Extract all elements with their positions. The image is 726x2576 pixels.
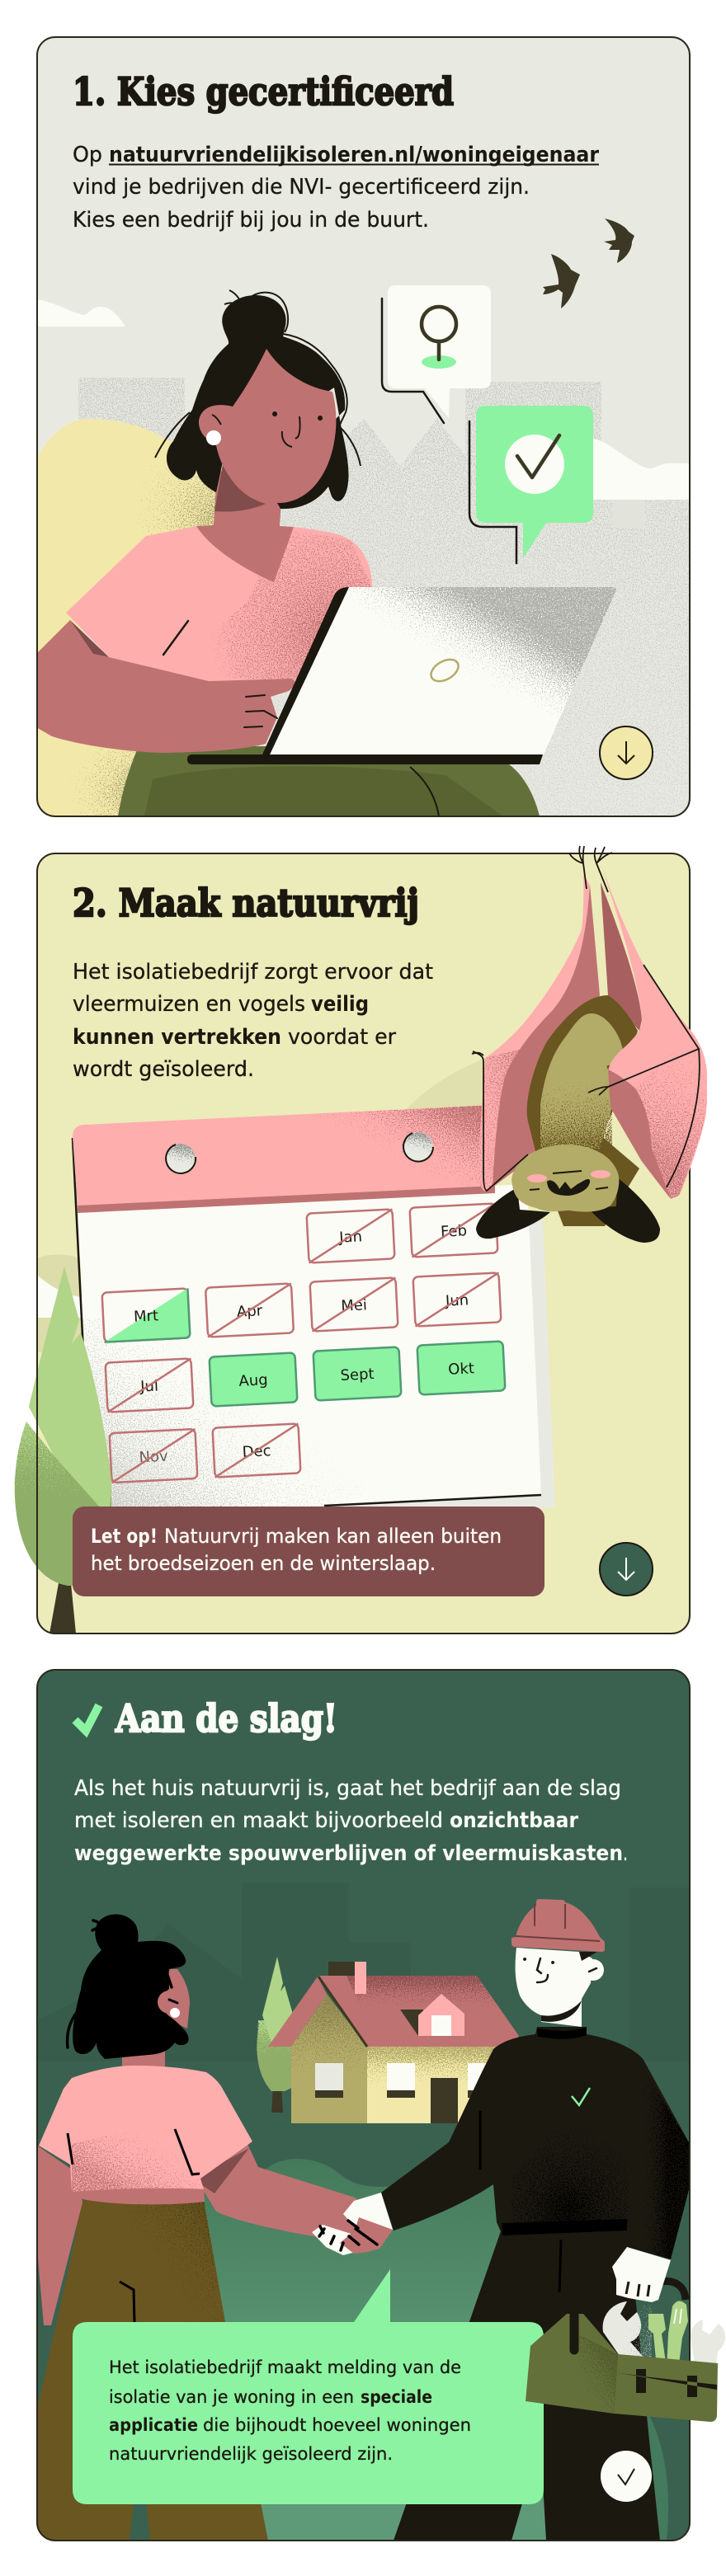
- hair: [167, 295, 349, 509]
- month: Jul: Jul: [139, 1377, 158, 1396]
- tree upper crown: [29, 1267, 111, 1516]
- ear line: [169, 2000, 177, 2003]
- calendar grain: [82, 1303, 541, 1517]
- callout: let op: Natuurvrij maken kan alleen buiten: [164, 1525, 502, 1548]
- tree trunk: [50, 1583, 76, 1634]
- panel 2 border: [37, 853, 690, 1634]
- waist: [72, 2185, 205, 2204]
- bat left wing inner: [493, 885, 600, 1187]
- hair outline: [155, 334, 361, 466]
- neck shadow: [214, 464, 266, 512]
- screwdriver highlight: [674, 2309, 681, 2324]
- callout: speciale applicatie: isolatie van je woning in een: [109, 2387, 354, 2408]
- laptop grain: [270, 587, 616, 754]
- intro text block 2: wordt geïsoleerd.: [73, 1057, 254, 1082]
- knee line: [410, 767, 439, 816]
- wrench left: [603, 2301, 652, 2367]
- arm grain: [631, 2061, 691, 2259]
- callout: speciale applicatie: die bijhoudt hoeveel woningen: [203, 2415, 471, 2436]
- collar: [537, 2027, 587, 2039]
- heading text: Aan de slag!: [115, 1696, 337, 1741]
- eyes: [272, 411, 323, 421]
- hole right: [403, 1132, 433, 1162]
- pants shading: [144, 766, 503, 816]
- month: Apr: [205, 1283, 294, 1337]
- pants: [36, 2200, 268, 2541]
- calendar back page: [91, 1219, 555, 1527]
- month: Mei: [310, 1277, 398, 1332]
- intro text block 1: natuurvriendelijkisoleren.nl/woningeigenaar: [109, 143, 599, 167]
- finger lines: [244, 695, 277, 727]
- intro text block 1: [73, 143, 599, 233]
- left gable wall: [291, 1994, 367, 2123]
- intro text block 3: .: [623, 1841, 628, 1866]
- callout: speciale applicatie: applicatie: [109, 2415, 198, 2436]
- bat belly grain: [540, 1080, 612, 1149]
- door: [431, 2078, 458, 2123]
- lighter window in the town: [612, 500, 645, 528]
- woman: [36, 290, 540, 816]
- dormer: [418, 1994, 464, 2036]
- right wall: [367, 2047, 507, 2123]
- month: Feb: Feb: [441, 1222, 468, 1241]
- bat right wing fold: [608, 1069, 671, 1199]
- eyes: [523, 1958, 554, 1964]
- nose and mouth: [282, 416, 300, 447]
- button: arrow down (green): [600, 1543, 653, 1596]
- gable roof: [268, 1977, 327, 2047]
- intro text block 1: vind je bedrijven die NVI- gecertificeerd zijn.: [73, 175, 530, 200]
- crease lines: [480, 2111, 561, 2292]
- intro text block 2: veilig: [311, 992, 369, 1017]
- wrench grain: [606, 2305, 652, 2367]
- bat mouth: [547, 1179, 590, 1196]
- roof grain: [346, 1976, 503, 2014]
- shirt fold: [163, 621, 188, 655]
- speech bubble: location pin: [382, 285, 491, 423]
- hills left of calendar: [36, 1254, 91, 1352]
- box strap: [569, 2314, 579, 2350]
- hair: [73, 1915, 189, 2059]
- bat blush: [527, 1170, 610, 1182]
- chimney pink: [355, 1962, 366, 1994]
- month: Okt: [417, 1341, 505, 1395]
- dark town silhouette: [36, 1883, 690, 2061]
- intro text block 3: [74, 1776, 628, 1866]
- month: Dec: Dec: [242, 1442, 271, 1461]
- small tree trunk: [271, 2086, 283, 2113]
- ear line: [212, 415, 221, 425]
- chimney dark: [328, 1962, 355, 1995]
- roof line: [318, 1977, 367, 2047]
- month: Feb: [410, 1203, 497, 1257]
- dormer shadow: [400, 2010, 423, 2036]
- pants: [118, 746, 540, 816]
- callout: speciale applicatie: natuurvriendelijk geïsoleerd zijn.: [109, 2444, 393, 2465]
- sideburn: [579, 1952, 597, 1961]
- sleeve shadow: [70, 620, 109, 657]
- panel fill: [36, 36, 690, 816]
- bush grain shadow bottom: [69, 747, 136, 816]
- month: Sept: [314, 1347, 401, 1401]
- month: Jul: [106, 1358, 193, 1413]
- callout: speciale applicatie: speciale: [361, 2387, 432, 2408]
- toolbox handle: [662, 2282, 686, 2300]
- intro text block 2: vleermuizen en vogels: [73, 992, 305, 1017]
- bat feet: [569, 846, 612, 892]
- arm: [36, 620, 295, 753]
- box right side: [614, 2354, 718, 2422]
- faint hill right of the worker: [635, 2391, 668, 2541]
- pants fold: [120, 2282, 134, 2322]
- toolbox: [526, 2301, 725, 2422]
- month: Aug: [210, 1352, 297, 1407]
- callout: let op: het broedseizoen en de winterslaap.: [91, 1552, 436, 1575]
- house and tree: [257, 1957, 519, 2123]
- bat belly: [540, 1013, 623, 1149]
- calendar header strip: [78, 1186, 495, 1213]
- bun outline and wisps: [224, 290, 288, 332]
- callout: speciale applicatie: Het isolatiebedrijf maakt melding van de: [109, 2357, 461, 2378]
- panel fill: [36, 853, 690, 1634]
- panel fill: [36, 1669, 690, 2541]
- intro text block 1: Op: [73, 143, 102, 167]
- heading 2: 2. Maak natuurvrij: [73, 881, 419, 925]
- month: Jun: Jun: [445, 1291, 469, 1310]
- hand holding box: [612, 2247, 671, 2302]
- shirt lines: [68, 2129, 200, 2174]
- hole left: [166, 1144, 196, 1173]
- helmet lines: [516, 1904, 600, 1941]
- month: Sept: Sept: [340, 1366, 375, 1384]
- intro text block 3: met isoleren en maakt bijvoorbeeld: [74, 1808, 443, 1833]
- bat ears: [476, 1178, 660, 1243]
- ear: [582, 1959, 604, 1981]
- screwdriver handle: [667, 2301, 688, 2371]
- month: Dec: [213, 1423, 300, 1478]
- panel background art: [36, 1669, 691, 2541]
- ear: [158, 1991, 181, 2014]
- outstretched arm: [198, 2144, 367, 2245]
- bat: [472, 846, 707, 1243]
- callout: let op: Let op!: [91, 1525, 158, 1548]
- intro text block 2: kunnen vertrekken: [73, 1025, 281, 1050]
- earring: [170, 2008, 180, 2018]
- small tree upper crown: [262, 1957, 294, 2045]
- woman seen from behind: [36, 1915, 367, 2541]
- chest check: [572, 2088, 590, 2105]
- shirt grain: [210, 531, 371, 683]
- bat right wing grain: [635, 1033, 707, 1199]
- month: Aug: Aug: [238, 1371, 268, 1390]
- roof: [318, 1976, 519, 2047]
- bat right wing inner: [601, 882, 642, 1031]
- intro text block 3: weggewerkte spouwverblijven of vleermuiskasten: [74, 1841, 623, 1866]
- sleeve shadow: [198, 2148, 249, 2193]
- laptop: [187, 587, 616, 764]
- panel 3 border: [37, 1670, 690, 2541]
- neck: [122, 2049, 165, 2072]
- small tree lower crown: [257, 2023, 297, 2091]
- bat right wing: [602, 867, 707, 1199]
- head: [516, 1948, 592, 2027]
- grey town silhouette: [78, 378, 690, 816]
- green hill: [198, 2159, 652, 2541]
- month: Mrt: [102, 1288, 190, 1342]
- bat head: [512, 1145, 619, 1212]
- month: Jan: [307, 1209, 394, 1263]
- waistband: [502, 2219, 627, 2235]
- tree: [14, 1267, 111, 1634]
- box left grain: [578, 2334, 618, 2414]
- finger lines: [626, 2282, 649, 2296]
- month: Jun: [413, 1272, 501, 1327]
- bat left wing grain: [477, 1047, 536, 1192]
- bat left wing: [477, 874, 600, 1192]
- heading 1: 1. Kies gecertificeerd: [73, 69, 454, 114]
- shirt: [39, 2066, 252, 2192]
- handshake: [312, 2193, 393, 2255]
- panel background art: [36, 853, 690, 1634]
- calendar bottom edge: [324, 1495, 541, 1506]
- cloud left: [36, 299, 125, 327]
- box left side: [526, 2314, 618, 2414]
- panel: 2. Maak natuurvrij: [14, 846, 707, 1634]
- face side: [157, 1969, 190, 2028]
- face: [199, 349, 336, 503]
- legs: [394, 2226, 660, 2541]
- tree lower crown grain: [14, 1422, 111, 1509]
- intro text block 3: onzichtbaar: [450, 1808, 578, 1833]
- worker: [312, 1899, 691, 2541]
- panel background art: [36, 36, 690, 816]
- worker hand: [343, 2193, 393, 2230]
- sweater: [381, 2027, 691, 2259]
- month: Okt: Okt: [448, 1360, 474, 1379]
- laptop base: [187, 754, 543, 764]
- hill behind calendar: [403, 1057, 488, 1113]
- calendar left edge: [73, 1138, 84, 1369]
- intro text block 2: [73, 960, 433, 1082]
- laptop screen back: [270, 587, 616, 754]
- sweater grain: [512, 2111, 629, 2226]
- screwdriver flat: [648, 2314, 667, 2368]
- month: Mrt: Mrt: [134, 1307, 159, 1326]
- left arm: [37, 2146, 82, 2325]
- month: Nov: [110, 1429, 197, 1483]
- shirt: [66, 526, 372, 684]
- callout: let op: [73, 1507, 544, 1596]
- button: arrow down (yellow): [600, 726, 653, 779]
- callout: speciale applicatie: [73, 2269, 544, 2504]
- small tree grain: [257, 2020, 297, 2061]
- calendar page: [78, 1184, 541, 1517]
- calendar header: [73, 1105, 495, 1207]
- tree lower crown: [15, 1422, 111, 1586]
- neck: [196, 470, 294, 594]
- laptop edge: [262, 587, 349, 754]
- yellow bush: [36, 419, 223, 816]
- earring: [206, 430, 221, 445]
- wall grain: [367, 2047, 507, 2092]
- face details: [537, 1958, 596, 1982]
- birds: [543, 219, 634, 308]
- window right: [468, 2063, 496, 2098]
- shirt grain: [72, 2119, 204, 2192]
- intro text block 1: Kies een bedrijf bij jou in de buurt.: [73, 208, 429, 233]
- box band and buckles: [615, 2369, 717, 2397]
- month: Apr: Apr: [236, 1302, 263, 1321]
- hair strands: [68, 1920, 172, 2047]
- panel: 1. Kies gecertificeerd: [36, 36, 690, 816]
- cloud right: [593, 439, 690, 500]
- dormer window: [431, 2015, 451, 2036]
- laptop logo: [427, 655, 462, 686]
- heading 3 with check: [75, 1696, 337, 1741]
- window left: [315, 2063, 343, 2098]
- month: Nov: Nov: [139, 1448, 168, 1466]
- speech bubble: check mark: [469, 406, 593, 563]
- panel 1 border: [37, 37, 690, 816]
- month: Mei: Mei: [341, 1296, 367, 1315]
- helmet: [512, 1899, 605, 1952]
- bat face lines: [530, 1171, 608, 1190]
- pants grain: [124, 2200, 248, 2433]
- button: check: [601, 2451, 652, 2502]
- window middle: [387, 2063, 415, 2098]
- finger lines: [319, 2221, 377, 2250]
- bush grain shadow top: [129, 439, 221, 543]
- month: Jan: Jan: [338, 1228, 362, 1247]
- panel: Aan de slag: [36, 1669, 725, 2541]
- chin shadow: [541, 2000, 582, 2022]
- gable grain: [291, 1994, 367, 2094]
- bat wing lines: [472, 965, 700, 1191]
- bat body: [527, 995, 639, 1226]
- wrench right: [691, 2320, 725, 2368]
- intro text block 3: Als het huis natuurvrij is, gaat het bedrijf aan de slag: [74, 1776, 621, 1801]
- intro text block 2: voordat er: [288, 1025, 397, 1050]
- woman fingers: [340, 2217, 393, 2254]
- white fingers: [312, 2225, 359, 2255]
- heading check icon: [75, 1705, 99, 1731]
- calendar header grain: [231, 1105, 495, 1192]
- intro text block 2: Het isolatiebedrijf zorgt ervoor dat: [73, 960, 433, 985]
